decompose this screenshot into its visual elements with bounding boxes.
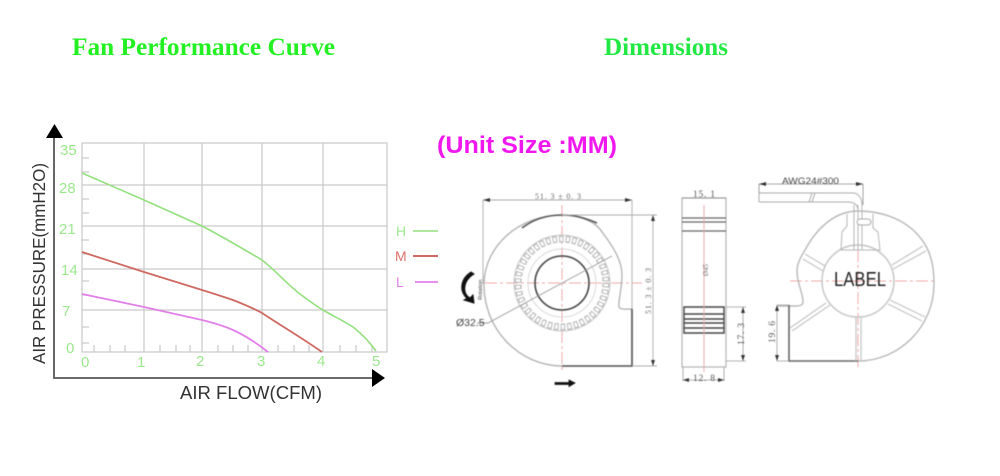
label text: LABEL xyxy=(834,269,886,291)
width dimension 15.1 xyxy=(682,190,726,200)
x axis scale: 2 xyxy=(196,353,204,370)
x axis scale: 5 xyxy=(372,353,380,370)
width dimension 15.1: 15. 1 xyxy=(693,190,715,200)
x axis scale: 1 xyxy=(137,354,145,371)
centre lines xyxy=(790,250,937,369)
side body xyxy=(682,198,726,367)
axes with arrows xyxy=(46,124,385,387)
curve L xyxy=(82,294,268,352)
wire lead xyxy=(759,193,862,209)
drawing: front view xyxy=(456,192,657,386)
curve M xyxy=(82,252,322,352)
wire dimension xyxy=(759,176,863,205)
y axis scale: 14 xyxy=(61,262,78,279)
height dimension xyxy=(562,215,657,366)
y axis scale xyxy=(59,142,78,357)
bracket height dimension 19.6 xyxy=(768,305,789,361)
legend: M xyxy=(395,248,407,264)
legend xyxy=(395,223,438,290)
housing dark edges xyxy=(522,215,632,366)
x axis scale: 3 xyxy=(257,353,265,370)
height dimension: 51. 3 ± 0. 3 xyxy=(644,268,653,314)
diameter leader xyxy=(477,256,612,323)
diameter label: Ø32.5 xyxy=(456,317,485,329)
housing outline xyxy=(484,215,632,366)
legend: H xyxy=(396,223,406,239)
outlet height dimension 17.3: 17. 3 xyxy=(737,323,747,345)
outlet block xyxy=(684,307,724,333)
outlet height dimension 17.3 xyxy=(726,307,747,361)
hub xyxy=(535,256,589,310)
centre lines xyxy=(485,205,642,372)
x axis scale xyxy=(81,353,380,371)
upper bands xyxy=(682,218,726,231)
hub and spokes xyxy=(790,245,926,361)
x axis title: AIR FLOW(CFM) xyxy=(180,383,322,403)
x axis scale: 0 xyxy=(81,354,89,371)
chart grid xyxy=(82,143,387,352)
y axis scale: 21 xyxy=(59,221,76,238)
wire channel xyxy=(841,205,880,250)
y axis scale: 0 xyxy=(66,340,74,357)
bracket dark edges xyxy=(789,305,858,361)
housing outline xyxy=(778,211,934,361)
icon: rotation arrow: Rotation xyxy=(478,280,484,300)
title: fan performance curve: Fan Performance Curve xyxy=(72,32,335,61)
icon: airflow arrow xyxy=(555,380,575,386)
icon: rotation arrow xyxy=(462,272,484,303)
side label: Ø45 xyxy=(702,263,710,276)
line chart: fan performance xyxy=(29,124,438,403)
cable slot xyxy=(857,219,871,225)
x axis scale: 4 xyxy=(317,353,325,370)
bracket height dimension 19.6: 19. 6 xyxy=(768,321,778,343)
bottom dimension 12.8 xyxy=(683,367,724,384)
drawing: side view xyxy=(682,190,747,384)
centre line xyxy=(703,205,705,372)
unit size note: (Unit Size :MM) xyxy=(437,132,617,159)
wire dimension: AWG24#300 xyxy=(782,176,839,187)
bottom dimension 12.8: 12. 8 xyxy=(693,374,715,384)
title: dimensions: Dimensions xyxy=(604,32,728,61)
width dimension: 51. 3 ± 0. 3 xyxy=(535,192,581,201)
y axis scale: 7 xyxy=(62,303,70,320)
y axis title: AIR PRESSURE(mmH2O) xyxy=(29,163,49,364)
y axis scale: 28 xyxy=(59,180,76,197)
width dimension xyxy=(483,192,632,309)
y axis scale: 35 xyxy=(60,142,77,159)
impeller blades xyxy=(514,235,610,331)
curve H xyxy=(82,173,376,351)
legend: L xyxy=(396,274,404,290)
drawing: rear view xyxy=(759,176,937,369)
